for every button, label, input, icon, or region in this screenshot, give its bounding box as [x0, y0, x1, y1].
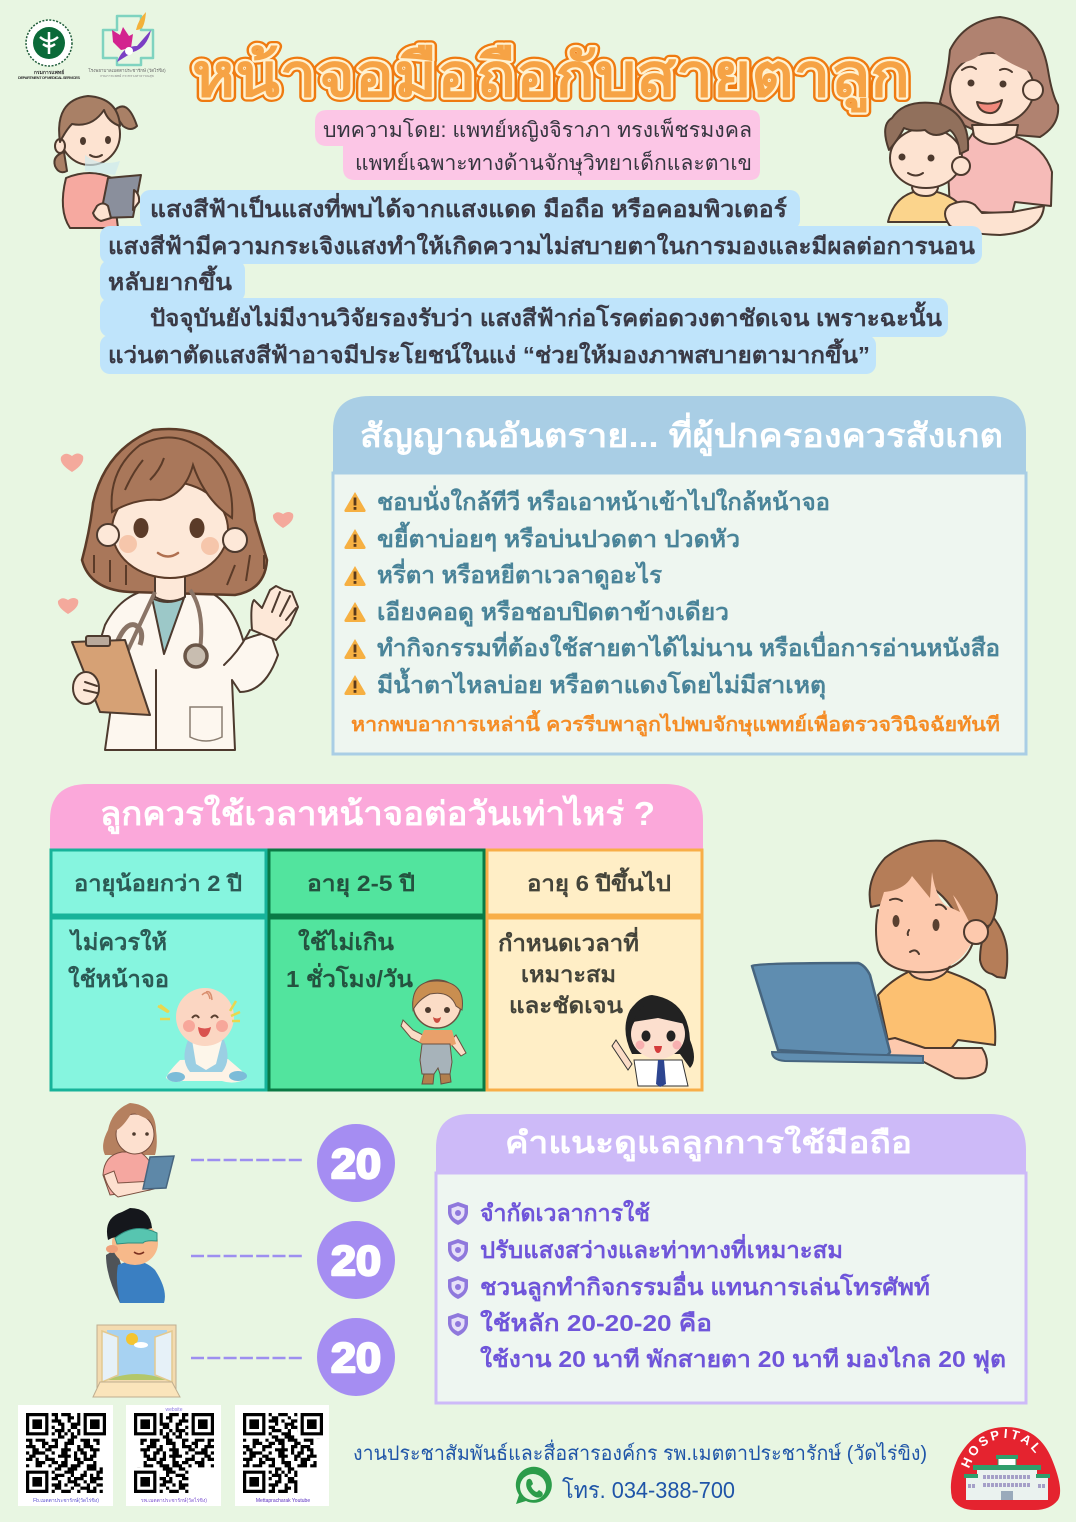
intro paragraph highlight [100, 190, 982, 374]
phone number: โทร. 034-388-700 [562, 1477, 735, 1503]
icon: hearts [58, 454, 293, 614]
list of warning signs: ชอบนั่งใกล้ทีวี หรือเอาหน้าเข้าไปใกล้หน้าจอ [377, 485, 830, 515]
badge: 20 minutes [317, 1124, 395, 1202]
list of advice: ชวนลูกทำกิจกรรมอื่น แทนการเล่นโทรศัพท์ [480, 1270, 930, 1302]
panel: warning signs [333, 396, 1026, 754]
QR code: website: รพ.เมตตาประชารักษ์(วัดไร่ขิง) [141, 1497, 207, 1504]
badge: 20 seconds: 20 [331, 1237, 381, 1284]
badge: hospital: HOSPITAL [961, 1428, 1039, 1468]
column: 6 and up: อายุ 6 ปีขึ้นไป [527, 867, 671, 898]
badge: 20 seconds [317, 1221, 395, 1299]
QR code: youtube [235, 1405, 329, 1506]
column: under 2: ใช้หน้าจอ [68, 965, 169, 992]
intro paragraph highlight: แสงสีฟ้าเป็นแสงที่พบได้จากแสงแดด มือถือ หรือคอมพิวเตอร์ [150, 192, 788, 222]
list of advice: ใช้หลัก 20-20-20 คือ [480, 1309, 712, 1336]
intro paragraph highlight: แสงสีฟ้ามีความกระเจิงแสงทำให้เกิดความไม่สบายตาในการมองและมีผลต่อการนอน [108, 232, 975, 259]
callout: see ophthalmologist: หากพบอาการเหล่านี้ ควรรีบพาลูกไปพบจักษุแพทย์เพื่อตรวจวินิจฉัยทันที [351, 709, 1000, 738]
list of warning signs [344, 485, 1000, 700]
illustration: open window [93, 1325, 180, 1397]
list of warning signs: เอียงคอดู หรือชอบปิดตาข้างเดียว [377, 599, 729, 627]
illustration: baby [158, 988, 247, 1083]
logo: department of medical services: DEPARTMENT OF MEDICAL SERVICES [18, 75, 80, 80]
logo: department of medical services [18, 20, 80, 80]
icon: phone [516, 1467, 552, 1504]
illustration: person with eye mask [106, 1208, 165, 1303]
badge: 20 minutes: 20 [331, 1140, 381, 1187]
list of warning signs: หรี่ตา หรือหยีตาเวลาดูอะไร [377, 558, 662, 590]
intro paragraph highlight: หลับยากขึ้น [108, 265, 232, 295]
illustration: student [612, 995, 694, 1087]
intro paragraph highlight: แว่นตาตัดแสงสีฟ้าอาจมีประโยชน์ในแง่ “ช่วยให้มองภาพสบายตามากขึ้น” [108, 338, 870, 368]
title: หน้าจอมือถือกับสายตาลูก [192, 42, 910, 113]
title: หน้าจอมือถือกับสายตาลูก [192, 42, 910, 113]
column: 2-5 years: อายุ 2-5 ปี [307, 871, 415, 898]
panel: phone care advice [436, 1114, 1026, 1403]
column: under 2: อายุน้อยกว่า 2 ปี [74, 871, 242, 898]
logo: hospital lotus [88, 12, 166, 79]
logo: hospital lotus: กรมการแพทย์ กระทรวงสาธารณสุข [100, 74, 154, 79]
column: 6 and up: และชัดเจน [509, 993, 623, 1018]
QR code: facebook [18, 1405, 113, 1506]
illustration: doctor [58, 429, 298, 750]
heading [50, 784, 703, 849]
list of warning signs: มีน้ำตาไหลบ่อย หรือตาแดงโดยไม่มีสาเหตุ [377, 667, 826, 700]
arrows: dashed connectors [191, 1160, 303, 1358]
badge: hospital [950, 1427, 1060, 1510]
column: 6 and up [487, 850, 702, 1090]
column: 6 and up: เหมาะสม [521, 962, 616, 987]
logo: hospital lotus: โรงพยาบาลเมตตาประชารักษ์ (วัดไร่ขิง) [88, 67, 166, 73]
heading: สัญญาณอันตราย... ที่ผู้ปกครองควรสังเกต [360, 412, 1003, 457]
list of advice: จำกัดเวลาการใช้ [480, 1199, 650, 1226]
list of advice: ใช้งาน 20 นาที พักสายตา 20 นาที มองไกล 20 ฟุต [480, 1345, 1006, 1374]
QR code: website: website [166, 1407, 183, 1413]
author pill [315, 110, 760, 180]
badge: 20 feet [317, 1318, 395, 1396]
illustration: girl with tablet small [103, 1103, 174, 1197]
column: under 2: ไม่ควรให้ [68, 928, 167, 955]
column: 2-5 years: ใช้ไม่เกิน [298, 928, 394, 955]
column: 6 and up: กำหนดเวลาที่ [498, 926, 639, 956]
logo: department of medical services: กรมการแพทย์ [34, 69, 64, 76]
badge: 20 feet: 20 [331, 1334, 381, 1381]
author pill: แพทย์เฉพาะทางด้านจักษุวิทยาเด็กและตาเข [355, 149, 752, 176]
rule 20-20-20 steps [93, 1103, 395, 1397]
QR code: youtube: Mettapracharak Youtube [256, 1498, 310, 1504]
list of advice [448, 1199, 1006, 1374]
list of warning signs: ทำกิจกรรมที่ต้องใช้สายตาได้ไม่นาน หรือเบื่อการอ่านหนังสือ [377, 631, 1000, 661]
footer text: งานประชาสัมพันธ์และสื่อสารองค์กร รพ.เมตตาประชารักษ์ (วัดไร่ขิง) [353, 1439, 927, 1465]
illustration: mother and child [885, 17, 1058, 235]
QR code: website [126, 1405, 221, 1506]
QR code: facebook: Fb.เมตตาประชารักษ์(วัดไร่ขิง) [33, 1497, 99, 1504]
author pill: บทความโดย: แพทย์หญิงจิราภา ทรงเพ็ชรมงคล [323, 116, 752, 142]
intro paragraph highlight: ปัจจุบันยังไม่มีงานวิจัยรองรับว่า แสงสีฟ้าก่อโรคต่อดวงตาชัดเจน เพราะฉะนั้น [150, 301, 942, 333]
illustration: girl with laptop [752, 841, 1007, 1078]
heading: คำแนะดูแลลูกการใช้มือถือ [505, 1125, 912, 1162]
column: 2-5 years [269, 850, 484, 1090]
column: under 2 [51, 850, 266, 1090]
illustration: toddler [401, 980, 466, 1084]
list of warning signs: ขยี้ตาบ่อยๆ หรือบ่นปวดตา ปวดหัว [377, 521, 740, 552]
panel: screen time table: ลูกควรใช้เวลาหน้าจอต่อวันเท่าไหร่ ? [100, 794, 655, 835]
illustration: girl with tablet [54, 96, 141, 228]
panel: screen time table [50, 784, 703, 1090]
list of advice: ปรับแสงสว่างและท่าทางที่เหมาะสม [480, 1233, 843, 1263]
column: 2-5 years: 1 ชั่วโมง/วัน [286, 962, 413, 992]
